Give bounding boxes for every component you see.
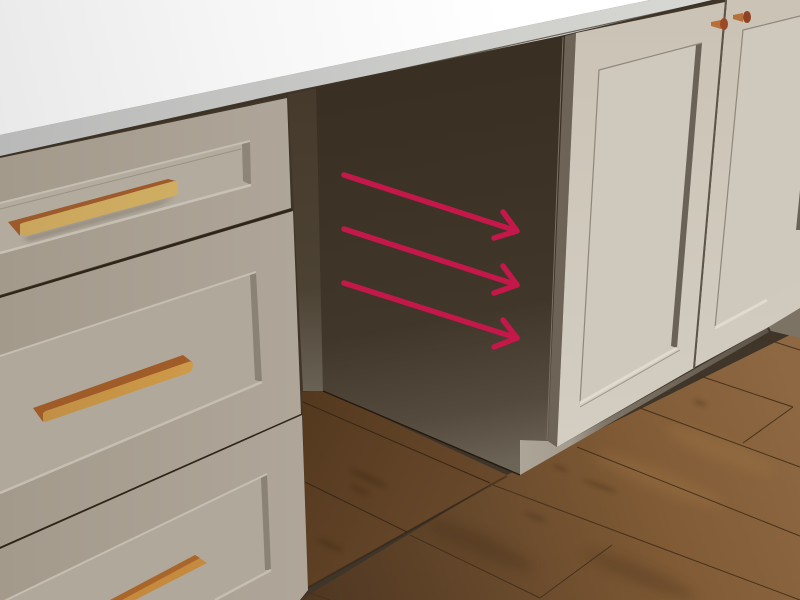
drawer 3 <box>0 415 308 600</box>
drawer 1 <box>0 98 291 295</box>
cabinet side panel <box>316 35 566 475</box>
drawer 3 inset panel <box>0 474 271 600</box>
copper knob right <box>733 11 751 23</box>
arrow: middle <box>344 229 517 293</box>
gap between drawers <box>0 210 292 297</box>
toe kick under doors <box>520 308 800 475</box>
floor: recess under desk <box>302 390 507 588</box>
shadow line at base of side panel <box>323 391 520 475</box>
right door left <box>547 2 725 447</box>
copper knob left <box>711 18 728 30</box>
arrow: top <box>344 175 517 238</box>
drawer 2 inset panel <box>0 272 262 493</box>
door inset panel <box>580 43 702 407</box>
right door right <box>694 0 800 368</box>
arrow: bottom <box>344 283 517 347</box>
countertop <box>0 0 712 157</box>
floor: foreground wood planks <box>300 330 800 600</box>
drawer 1 gold handle <box>8 179 178 236</box>
gap between drawers lower <box>0 414 302 548</box>
recess back wall <box>288 86 323 391</box>
drawer 3 gold handle <box>110 555 207 600</box>
drawer 2 gold handle <box>33 355 193 422</box>
drawer 1 inset panel <box>0 141 251 253</box>
door inset panel <box>715 16 800 328</box>
drawer 2 <box>0 211 301 547</box>
handle shadow <box>22 196 176 241</box>
